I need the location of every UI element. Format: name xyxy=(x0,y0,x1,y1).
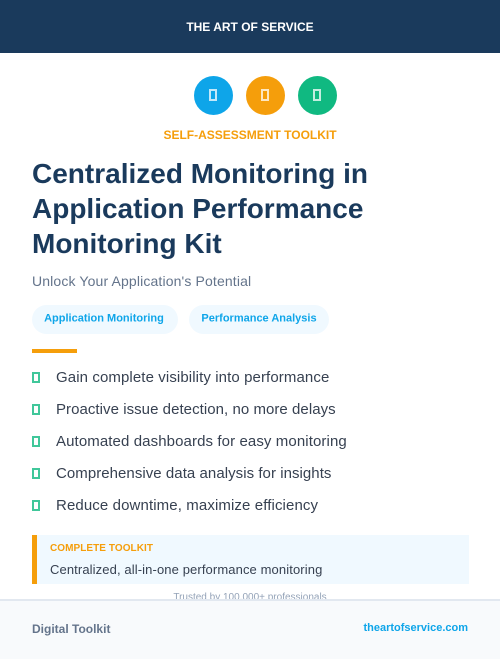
check icon 4 xyxy=(32,468,40,479)
tag: Performance Analysis: Performance Analysis xyxy=(201,312,317,324)
trust line: Trusted by 100,000+ professionals xyxy=(173,592,327,603)
benefits list xyxy=(32,369,347,514)
check icon 5 xyxy=(32,500,40,511)
header band xyxy=(0,0,500,53)
check icon 2 xyxy=(32,404,40,415)
accent divider xyxy=(32,349,77,353)
benefit 2: Proactive issue detection, no more delays xyxy=(56,401,336,418)
icon: orange circle xyxy=(246,76,285,115)
benefit 1: Gain complete visibility into performance xyxy=(56,369,329,386)
callout panel xyxy=(32,535,469,584)
icon: blue circle xyxy=(194,76,233,115)
check icon 3 xyxy=(32,436,40,447)
footer band xyxy=(0,599,500,659)
footer url: theartofservice.com xyxy=(363,622,468,634)
title: Application Performance xyxy=(32,193,363,224)
header band: THE ART OF SERVICE xyxy=(186,20,314,34)
eyebrow label: SELF-ASSESSMENT TOOLKIT xyxy=(163,128,337,142)
icon: green circle xyxy=(298,76,337,115)
tag: Performance Analysis xyxy=(189,305,329,334)
subtitle: Unlock Your Application's Potential xyxy=(32,273,251,289)
title: Centralized Monitoring in xyxy=(32,158,368,189)
title xyxy=(32,158,368,259)
title: Monitoring Kit xyxy=(32,228,222,259)
benefit 5: Reduce downtime, maximize efficiency xyxy=(56,497,318,514)
check icon 1 xyxy=(32,372,40,383)
tag: Application Monitoring xyxy=(32,305,178,334)
callout accent bar xyxy=(32,535,37,584)
callout label: COMPLETE TOOLKIT xyxy=(50,543,153,554)
benefit 3: Automated dashboards for easy monitoring xyxy=(56,433,347,450)
benefit 4: Comprehensive data analysis for insights xyxy=(56,465,331,482)
footer left label: Digital Toolkit xyxy=(32,622,110,636)
tag: Application Monitoring: Application Monitoring xyxy=(44,312,164,324)
callout text: Centralized, all-in-one performance monitoring xyxy=(50,562,322,577)
